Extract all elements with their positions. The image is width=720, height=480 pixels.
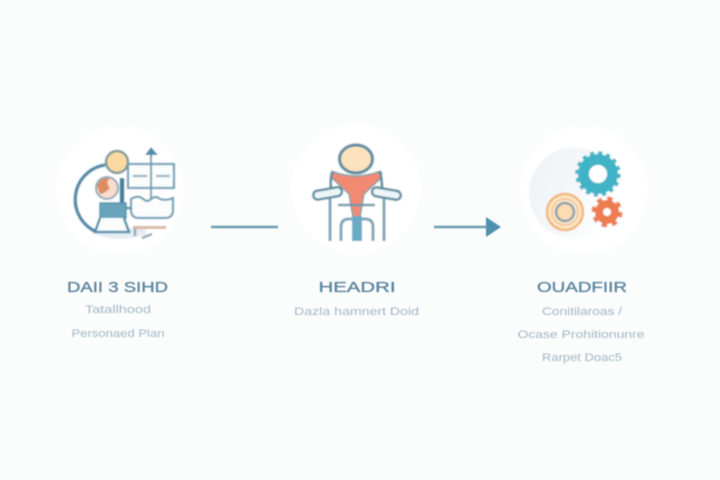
text: step three description: Ocase Prohitionunre	[518, 329, 644, 341]
heading: step three: OUADFIIR	[537, 279, 627, 296]
arrow connector	[434, 217, 501, 237]
heading: step one: DAII 3 SIHD	[67, 279, 168, 296]
panel: step three icon	[520, 126, 648, 254]
text: step three description	[518, 306, 644, 364]
text: step one description: Personaed Plan	[72, 328, 164, 340]
heading: step two: HEADRI	[318, 279, 396, 296]
text: step one description: Tatallhood	[85, 304, 151, 316]
panel: step one icon	[56, 126, 184, 254]
text: step one description	[72, 304, 164, 340]
text: step two description: Dazla hamnert Doid	[294, 306, 419, 318]
panel: step two icon	[291, 125, 421, 255]
text: step three description: Rarpet Doac5	[542, 352, 622, 364]
text: step three description: Conitilaroas /	[542, 306, 623, 318]
line connector	[211, 226, 278, 228]
